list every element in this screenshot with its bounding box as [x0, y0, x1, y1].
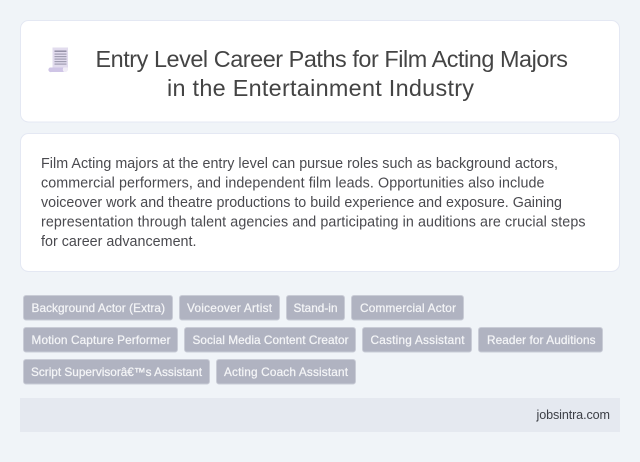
- icon: document scroll: [48, 48, 68, 72]
- tag: Background Actor: Background Actor (Extra): [32, 301, 165, 315]
- description text: representation through talent agencies and participating in auditions are crucial steps: [41, 214, 586, 230]
- tag: Motion Capture Performer: [24, 328, 178, 352]
- panel: description: [20, 134, 620, 272]
- title text: in the Entertainment Industry: [167, 75, 474, 101]
- tag: Stand-in: [286, 296, 344, 320]
- description text: [41, 156, 586, 250]
- panel: title header: [20, 20, 620, 122]
- tag: Acting Coach Assistant: [216, 360, 356, 384]
- description text: for career advancement.: [41, 234, 196, 250]
- tag: Reader for Auditions: Reader for Auditions: [487, 333, 596, 347]
- footer source text: jobsintra.com: [536, 408, 610, 422]
- tag: Script Supervisor's Assistant: [24, 360, 210, 384]
- description text: Film Acting majors at the entry level can pursue roles such as background actors,: [41, 156, 558, 172]
- tag: Reader for Auditions: [478, 328, 602, 352]
- description text: voiceover work and theatre productions to build experience and exposure. Gaining: [41, 195, 562, 211]
- tag: Background Actor: [24, 296, 172, 320]
- tag: Acting Coach Assistant: Acting Coach Assistant: [224, 365, 349, 379]
- tag: Motion Capture Performer: Motion Capture Performer: [32, 333, 171, 347]
- tag: Commercial Actor: [352, 296, 464, 320]
- tag: Casting Assistant: [362, 328, 472, 352]
- tag: Social Media Content Creator: [184, 328, 356, 352]
- tag: Voiceover Artist: [180, 296, 280, 320]
- title text: Entry Level Career Paths for Film Acting Majors: [96, 46, 568, 72]
- tag: Stand-in: Stand-in: [294, 301, 338, 315]
- tag: Social Media Content Creator: Social Media Content Creator: [192, 333, 349, 347]
- footer: [20, 398, 620, 432]
- tag: Casting Assistant: Casting Assistant: [370, 333, 465, 347]
- tag list: [24, 296, 602, 384]
- tag: Voiceover Artist: Voiceover Artist: [187, 301, 273, 315]
- title text: [96, 46, 568, 101]
- tag: Script Supervisor's Assistant: Script Supervisorâ€™s Assistant: [31, 365, 203, 379]
- tag: Commercial Actor: Commercial Actor: [360, 301, 456, 315]
- description text: commercial performers, and independent film leads. Opportunities also include: [41, 176, 545, 192]
